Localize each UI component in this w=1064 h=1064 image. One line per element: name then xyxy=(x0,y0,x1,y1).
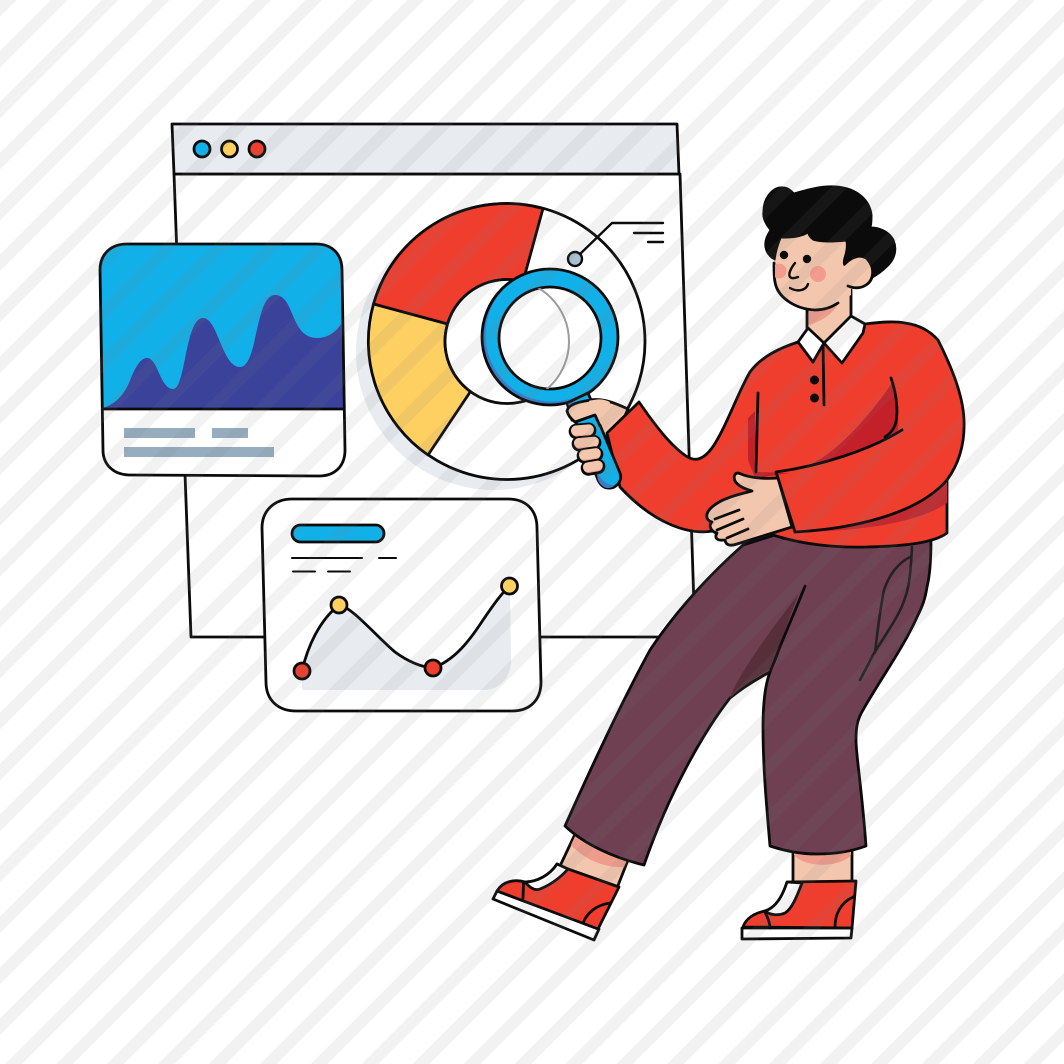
nose xyxy=(789,263,798,278)
window title bar xyxy=(172,124,679,174)
trouser fold line xyxy=(770,586,805,672)
mouth xyxy=(790,284,808,290)
finger 3 xyxy=(577,447,603,463)
panel: blue area chart card xyxy=(100,244,345,476)
caption bars xyxy=(124,428,274,457)
donut hole xyxy=(445,280,569,404)
character: left leg ankle xyxy=(560,830,630,888)
trouser fold shade xyxy=(730,595,798,698)
hair xyxy=(763,186,896,278)
cheeks xyxy=(810,266,826,282)
character: trousers xyxy=(565,535,931,865)
yellow segment xyxy=(368,304,470,455)
finger 2 xyxy=(573,436,601,451)
magnifying glass lens xyxy=(480,268,620,406)
donut chart xyxy=(356,204,663,490)
area wave xyxy=(103,295,344,409)
text lines xyxy=(292,558,396,572)
finger 4 xyxy=(581,459,605,475)
chart line xyxy=(302,586,510,671)
chart points xyxy=(294,578,518,679)
window buttons xyxy=(194,141,265,157)
character: head xyxy=(763,186,896,310)
character: shirt collar xyxy=(798,316,865,363)
chart area xyxy=(302,586,511,690)
panel: line chart card xyxy=(262,499,541,711)
shoe: front left foot xyxy=(493,864,619,940)
sweater fold lines xyxy=(756,343,947,532)
trouser pocket xyxy=(860,547,912,680)
character: red sweater xyxy=(607,322,964,547)
card outline xyxy=(100,244,345,476)
character: right leg ankle xyxy=(793,845,852,884)
thumb over handle xyxy=(567,399,610,426)
sweater buttons xyxy=(810,376,819,402)
panel: browser window xyxy=(172,124,695,637)
character: right hand xyxy=(707,472,795,545)
eyes xyxy=(780,251,788,259)
shoe: back right foot xyxy=(742,881,856,939)
sweater underarm shade xyxy=(810,383,898,465)
callout leader xyxy=(568,223,663,266)
hand palm behind sleeve xyxy=(590,400,628,445)
character: neck xyxy=(807,285,851,343)
red segment xyxy=(374,204,543,324)
finger 1 xyxy=(569,423,596,439)
ear xyxy=(846,258,873,288)
magnifier handle xyxy=(575,413,621,488)
sweater side shade xyxy=(748,411,790,478)
sweater hem shade xyxy=(795,480,947,532)
magnifier neck xyxy=(567,393,596,420)
pill heading xyxy=(292,525,384,542)
fingers gripping handle xyxy=(569,423,605,475)
